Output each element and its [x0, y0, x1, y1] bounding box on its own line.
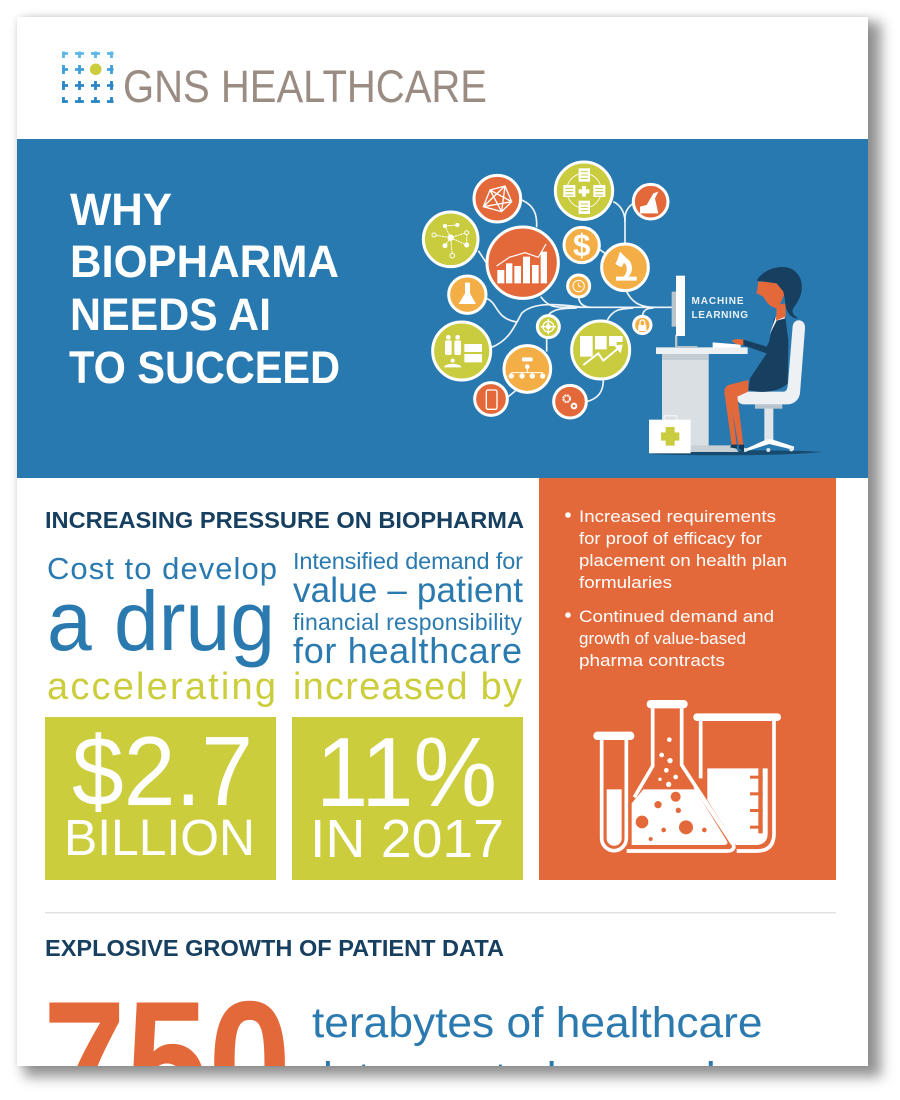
text block: demand for value: value – patient: [293, 571, 523, 610]
text block: cost to develop a drug: accelerating: [47, 666, 276, 708]
title: [69, 184, 340, 393]
woman: [724, 267, 802, 451]
text block: demand for value: Intensified demand for: [293, 548, 523, 574]
connector lines: [478, 200, 673, 402]
icon: hospitals around a cross: [563, 168, 605, 214]
bullet list: Continued demand and: [579, 607, 774, 626]
machine learning label: LEARNING: [692, 310, 748, 321]
text block: demand for value: financial responsibility: [293, 609, 522, 635]
bullet list: formularies: [579, 573, 672, 592]
stat box: $2.7 billion: BILLION: [64, 809, 255, 866]
logo wordmark: GNS HEALTHCARE: [123, 61, 487, 112]
icon: lab glassware: [593, 700, 781, 851]
icon: clock: [573, 280, 584, 292]
icon: bar chart with trend line: [497, 244, 547, 283]
keyboard: [713, 342, 741, 348]
network diagram of data icons: [423, 162, 673, 418]
icon: smartphone: [486, 390, 497, 409]
panel: blue hero banner: [17, 139, 868, 478]
icon: small lab flask: [459, 283, 476, 304]
text block: cost to develop a drug: a drug: [47, 574, 275, 668]
machine learning label: [692, 296, 748, 321]
floor shadow: [648, 450, 822, 455]
stat box: 11% in 2017: IN 2017: [310, 809, 504, 869]
bullet list: pharma contracts: [579, 651, 725, 670]
bullet list: growth of value-based: [579, 629, 746, 648]
text block: demand for value: increased by: [293, 666, 522, 708]
panel: orange requirements: [539, 478, 836, 880]
text block: cost to develop a drug: Cost to develop: [47, 551, 277, 586]
node circles: [423, 162, 668, 418]
cropped lower section: [43, 985, 763, 1066]
stat box: $2.7 billion: $2.7: [72, 716, 253, 826]
bullet list: [565, 507, 787, 670]
chair: [737, 320, 805, 452]
icon: population of people: [444, 335, 482, 367]
text block: demand for value: for healthcare: [293, 630, 522, 671]
stat box: 11% in 2017: [292, 717, 523, 880]
icon: logo dot grid: [62, 52, 114, 103]
icon: gears: [563, 395, 576, 408]
computer monitor: [672, 276, 697, 348]
icon: growth chart: [580, 336, 623, 365]
title: WHY: [70, 184, 172, 235]
bullet list: Increased requirements: [579, 507, 776, 526]
text block: demand for value: [293, 548, 523, 708]
text block: cost to develop a drug: [47, 551, 277, 708]
heading: increasing pressure: INCREASING PRESSURE ON BIOPHARMA: [45, 507, 524, 533]
bullet list: placement on health plan: [579, 551, 787, 570]
icon: dollar sign: $: [573, 228, 590, 263]
stat box: $2.7 billion: [45, 716, 276, 880]
first-aid kit: [649, 416, 691, 453]
infographic artwork: [17, 52, 868, 956]
text: terabytes of healthcare: terabytes of healthcare: [312, 999, 763, 1047]
stat box: 11% in 2017: 11%: [316, 717, 497, 827]
title: TO SUCCEED: [69, 342, 340, 393]
icon: stairs: [640, 192, 658, 213]
illustration: woman at a computer: [648, 267, 822, 455]
icon: polygon mesh: [483, 186, 512, 212]
icon: lock: [638, 320, 646, 331]
title: BIOPHARMA: [70, 236, 339, 287]
machine learning label: MACHINE: [692, 296, 744, 307]
desk: [656, 347, 748, 452]
icon: connected nodes: [432, 223, 469, 258]
icon: target: [541, 319, 556, 334]
title: NEEDS AI: [70, 289, 271, 340]
icon: org chart: [509, 357, 545, 379]
heading: explosive growth: EXPLOSIVE GROWTH OF PATIENT DATA: [45, 935, 504, 961]
logo: GNS Healthcare: [62, 52, 486, 103]
icon: microscope: [615, 252, 637, 281]
bullet list: for proof of efficacy for: [579, 529, 762, 548]
